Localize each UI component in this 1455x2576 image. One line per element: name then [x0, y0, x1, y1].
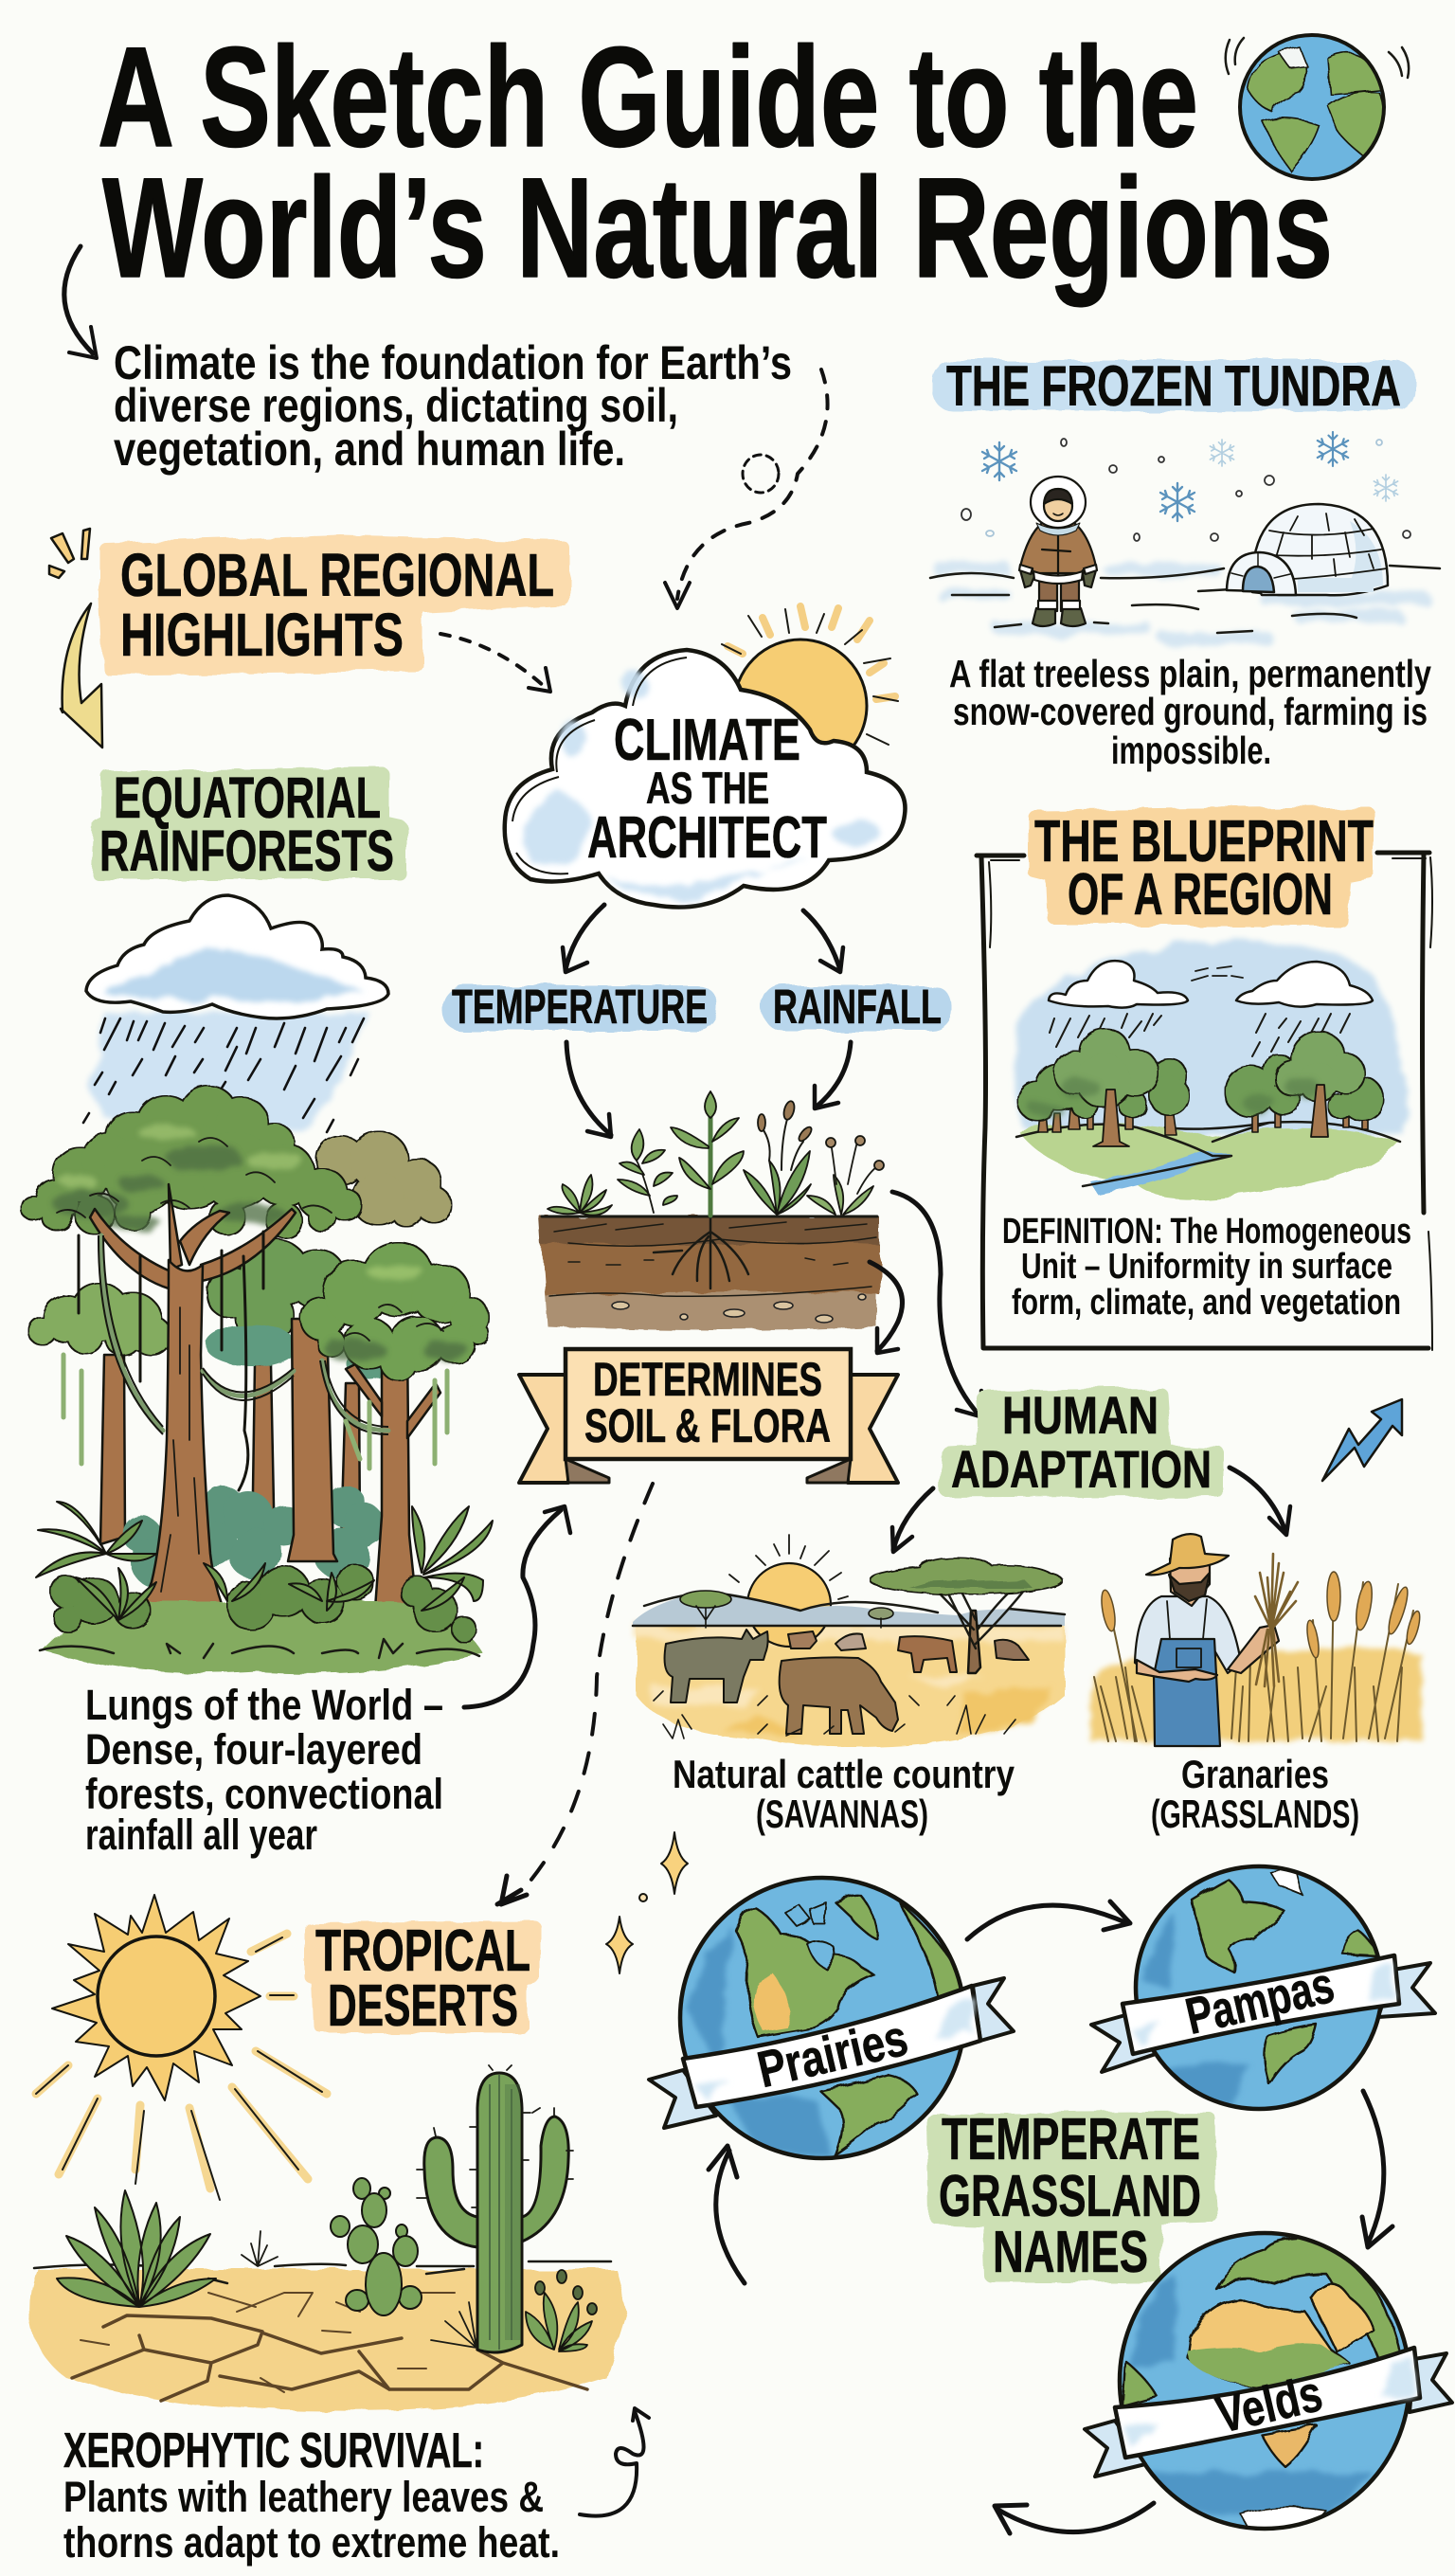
rainforest description: forests, convectional [85, 1770, 443, 1818]
grassland caption: Granaries [1181, 1752, 1329, 1796]
savanna caption [673, 1752, 1015, 1836]
arrow: velds to bottom [995, 2503, 1154, 2533]
arrows: factors to soil [566, 1042, 851, 1137]
globe: prairies [649, 1878, 1014, 2158]
heading: temperate grassland names: TEMPERATE [942, 2107, 1200, 2172]
flowering plant [526, 2270, 597, 2351]
intro text: vegetation, and human life. [114, 423, 625, 476]
figure: person in parka [1019, 477, 1097, 626]
banner: pampas [1091, 1955, 1435, 2072]
arrow: dashed loop to climate [665, 369, 828, 608]
heading: human adaptation: ADAPTATION [951, 1439, 1212, 1499]
illustration: desert ground and cacti [30, 2065, 627, 2411]
saguaro cactus [424, 2073, 568, 2352]
heading: temperate grassland names [934, 2107, 1211, 2285]
soil layers [540, 1213, 879, 1330]
illustration: desert sun [36, 1895, 327, 2200]
rainforest description: Dense, four-layered [85, 1725, 422, 1774]
tundra description: impossible. [1111, 729, 1271, 772]
main canopy [22, 1087, 361, 1237]
heading: temperate grassland names: GRASSLAND [939, 2164, 1201, 2229]
heading: tropical deserts: TROPICAL [315, 1918, 530, 1984]
arrows: climate to factors [563, 905, 843, 972]
farmer figure [1135, 1534, 1279, 1746]
rainforest description: Lungs of the World – [85, 1681, 443, 1729]
plants [548, 1091, 884, 1216]
banner: determines soil and flora [519, 1349, 898, 1483]
wheat bundle [1255, 1554, 1298, 1686]
arrow: soil to human adaptation [892, 1192, 983, 1417]
illustration: rain cloud [83, 895, 388, 1132]
heading: temperate grassland names: NAMES [993, 2220, 1148, 2285]
savanna caption: Natural cattle country [673, 1752, 1015, 1796]
rainforest description: rainfall all year [85, 1810, 317, 1859]
arrow: prairies to pampas [967, 1901, 1130, 1939]
arrow: pampas to velds [1362, 2091, 1392, 2247]
icon: globe in title [1226, 35, 1409, 179]
callout: climate as the architect cloud: AS THE [646, 763, 769, 813]
illustration: savanna scene [633, 1535, 1065, 1747]
arrows: adaptation to outcomes [892, 1468, 1290, 1552]
illustration: tundra scene [930, 432, 1440, 643]
illustration: rainforest trees [22, 1087, 493, 1673]
teal undergrowth [123, 1486, 386, 1588]
intro text: Climate is the foundation for Earth’s [114, 336, 792, 389]
heading: global regional highlights: HIGHLIGHTS [120, 601, 404, 669]
prickly pear cactus [331, 2178, 422, 2315]
banner: prairies [649, 1978, 1014, 2128]
heading: human adaptation [947, 1385, 1218, 1499]
banner: prairies: Prairies [752, 2009, 913, 2099]
back trunks [100, 1355, 360, 1554]
heading: OF A REGION [1068, 862, 1333, 928]
ground foliage [36, 1502, 493, 1673]
heading: equatorial rainforests: EQUATORIAL [114, 766, 381, 830]
main trunk and branches [90, 1184, 296, 1637]
cattle [665, 1630, 1029, 1734]
banner: determines soil and flora: SOIL & FLORA [584, 1399, 831, 1452]
illustration: sun behind cloud [722, 606, 898, 772]
mid trunk [288, 1319, 337, 1561]
callout: climate as the architect cloud: CLIMATE [614, 708, 800, 773]
heading: tropical deserts [311, 1918, 534, 2039]
banner: determines soil and flora: DETERMINES [593, 1353, 822, 1406]
arrow: title to intro [64, 246, 97, 358]
grassland caption [1151, 1752, 1359, 1836]
heading: tropical deserts: DESERTS [328, 1973, 518, 2039]
back canopies [29, 1132, 451, 1379]
right tree [301, 1243, 488, 1609]
heading [1034, 809, 1374, 928]
figure: igloo [1227, 504, 1388, 595]
intro text: diverse regions, dictating soil, [114, 379, 678, 432]
icon: burst marks [49, 529, 90, 578]
callout: climate as the architect cloud: ARCHITECT [587, 805, 827, 871]
definition text [1002, 1212, 1411, 1323]
illustration: landscape [1015, 941, 1404, 1198]
callout: climate as the architect cloud [505, 650, 906, 908]
banner: velds: Velds [1212, 2365, 1327, 2444]
savanna caption: (SAVANNAS) [756, 1792, 928, 1836]
agave [57, 2190, 216, 2307]
arrow: dashed banner to deserts [497, 1484, 653, 1904]
xerophytic survival text: Plants with leathery leaves & [63, 2473, 544, 2521]
rainforest description [85, 1681, 443, 1859]
globe: pampas [1091, 1866, 1435, 2109]
icon: sparkles [606, 1832, 688, 1973]
icon: blue zigzag arrow [1322, 1399, 1402, 1481]
acacia tree [871, 1558, 1061, 1673]
frame [977, 853, 1432, 1350]
heading: global regional highlights: GLOBAL REGIONAL [120, 541, 554, 609]
title [98, 17, 1333, 307]
banner: pampas: Pampas [1180, 1956, 1339, 2045]
illustration: farmer in wheat field [1089, 1534, 1423, 1746]
label: rainfall: RAINFALL [773, 980, 942, 1034]
heading: equatorial rainforests: RAINFORESTS [99, 819, 394, 883]
xerophytic survival text [63, 2423, 560, 2567]
arrow: highlights to climate [440, 634, 550, 692]
arrow: up to prairies [709, 2146, 745, 2283]
trees [1038, 1108, 1368, 1135]
grassland caption: (GRASSLANDS) [1151, 1792, 1359, 1836]
globe: velds [1085, 2233, 1452, 2531]
small trees [680, 1591, 893, 1628]
label: temperature: TEMPERATURE [452, 980, 708, 1034]
heading: equatorial rainforests [99, 766, 400, 883]
banner: velds [1085, 2348, 1452, 2477]
xerophytic survival text: thorns adapt to extreme heat. [63, 2518, 560, 2567]
tundra description [949, 652, 1431, 772]
arrow: soil to banner [870, 1262, 903, 1353]
arrow: yellow down arrow [61, 603, 102, 748]
intro text [114, 336, 792, 476]
xerophytic survival text: XEROPHYTIC SURVIVAL: [63, 2423, 484, 2478]
vines [63, 1232, 447, 1490]
illustration: soil and plants [540, 1091, 884, 1330]
heading: human adaptation: HUMAN [1002, 1385, 1159, 1445]
arrow: squiggle up [580, 2408, 649, 2516]
heading: global regional highlights [106, 541, 563, 669]
panel: blueprint of a region [977, 809, 1432, 1350]
arrow: rainforest to banner [464, 1506, 570, 1707]
